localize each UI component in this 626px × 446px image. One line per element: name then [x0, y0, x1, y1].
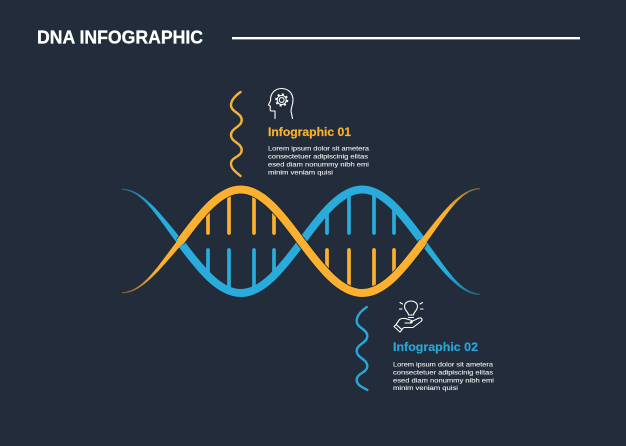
title rule	[232, 37, 580, 39]
heading: Infographic 01: Infographic 01	[268, 125, 351, 139]
blue rungs	[208, 192, 394, 292]
body text 01: consectetuer adipiscinig elitas	[268, 154, 369, 160]
icon: hand holding light bulb	[394, 301, 423, 332]
icon: head with gear	[268, 88, 293, 118]
body text 01: Lorem ipsum dolor sit ametera	[268, 146, 369, 152]
blue wavy line	[357, 307, 367, 390]
yellow rungs	[208, 192, 394, 292]
yellow wavy line	[231, 92, 242, 176]
blue strand	[122, 189, 480, 295]
body text 02: consectetuer adipiscinig elitas	[393, 370, 494, 376]
body text 02: esed diam nonummy nibh emi	[393, 378, 495, 384]
body text 02: Lorem ipsum dolor sit ametera	[393, 362, 493, 368]
body text 01	[268, 146, 370, 176]
body text 02: minim veniam quisi	[393, 385, 459, 392]
title: DNA INFOGRAPHIC	[37, 28, 203, 48]
yellow strand	[122, 188, 480, 293]
body text 02	[393, 362, 495, 392]
DNA helix	[122, 188, 480, 295]
body text 01: esed diam nonummy nibh emi	[268, 162, 370, 168]
body text 01: minim veniam quisi	[268, 170, 334, 176]
heading: Infographic 02: Infographic 02	[393, 340, 478, 354]
